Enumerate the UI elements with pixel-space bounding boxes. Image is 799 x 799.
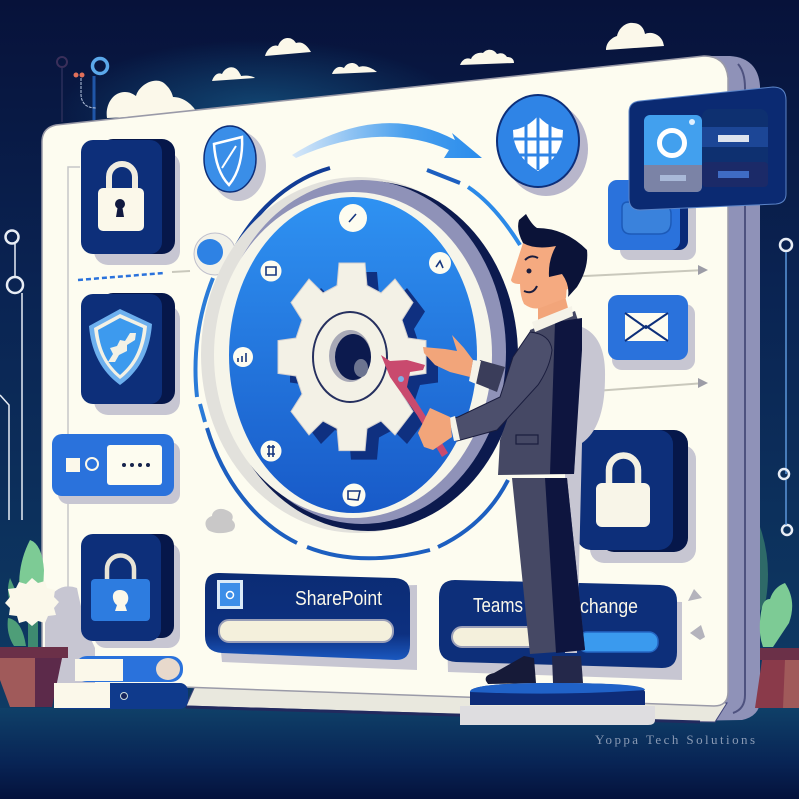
figure shadow xyxy=(565,327,605,653)
clouds xyxy=(107,23,664,118)
plant right xyxy=(755,583,799,708)
card: wide password xyxy=(52,434,180,504)
card: lock right xyxy=(577,430,696,563)
bar: SharePoint xyxy=(205,573,417,670)
bar: Teams Exchange: Teams xyxy=(473,595,523,617)
card: mail xyxy=(608,295,695,370)
books xyxy=(54,656,188,709)
icon: small shield badge xyxy=(204,126,266,201)
ear xyxy=(553,273,571,291)
upper hand xyxy=(423,335,473,377)
jacket xyxy=(498,311,582,475)
board bottom ledge xyxy=(186,686,727,722)
dial small icons xyxy=(233,204,451,506)
circular dashed ring xyxy=(195,168,520,558)
upper sleeve xyxy=(475,360,505,392)
plant left xyxy=(0,540,68,707)
icon: shield badge xyxy=(497,95,588,196)
eye and mouth xyxy=(524,256,538,292)
wrench xyxy=(381,355,448,457)
grey marks right xyxy=(688,589,705,640)
hair xyxy=(518,214,587,297)
gear xyxy=(278,263,426,451)
arrow: curved xyxy=(292,123,482,158)
person xyxy=(381,214,587,684)
gear shadow xyxy=(290,272,438,460)
card: lock top-left xyxy=(81,139,180,265)
cuffs xyxy=(449,360,481,441)
face xyxy=(511,243,568,308)
network lines top-left xyxy=(57,57,108,122)
floor xyxy=(0,708,799,799)
bottom shadow blob xyxy=(45,586,95,688)
panel: top-right window xyxy=(629,87,786,210)
bar: Teams Exchange xyxy=(439,580,682,680)
dashed connector lines xyxy=(78,265,708,391)
network lines right xyxy=(779,239,792,535)
watermark: Yoppa Tech Solutions xyxy=(595,732,755,747)
lower hand xyxy=(418,408,452,450)
dial xyxy=(201,177,518,533)
arm xyxy=(450,332,552,441)
bar: SharePoint: SharePoint xyxy=(295,588,382,610)
collar xyxy=(532,306,573,332)
pocket xyxy=(516,435,538,444)
card: camera xyxy=(608,180,696,260)
card: shield xyxy=(81,293,180,415)
plant right back leaf xyxy=(760,527,768,611)
pedestal xyxy=(460,683,655,725)
small grey blob icon xyxy=(205,509,235,533)
bar: Teams Exchange: change xyxy=(580,596,638,618)
network lines left xyxy=(0,230,23,520)
shoes xyxy=(486,656,536,684)
gear hub xyxy=(313,312,387,402)
card: blue lock xyxy=(81,534,180,648)
board side xyxy=(682,56,760,721)
board xyxy=(42,56,728,706)
trousers xyxy=(512,478,585,654)
neck xyxy=(538,296,568,320)
board bottom shadow line xyxy=(186,707,700,722)
small round node xyxy=(194,233,236,275)
